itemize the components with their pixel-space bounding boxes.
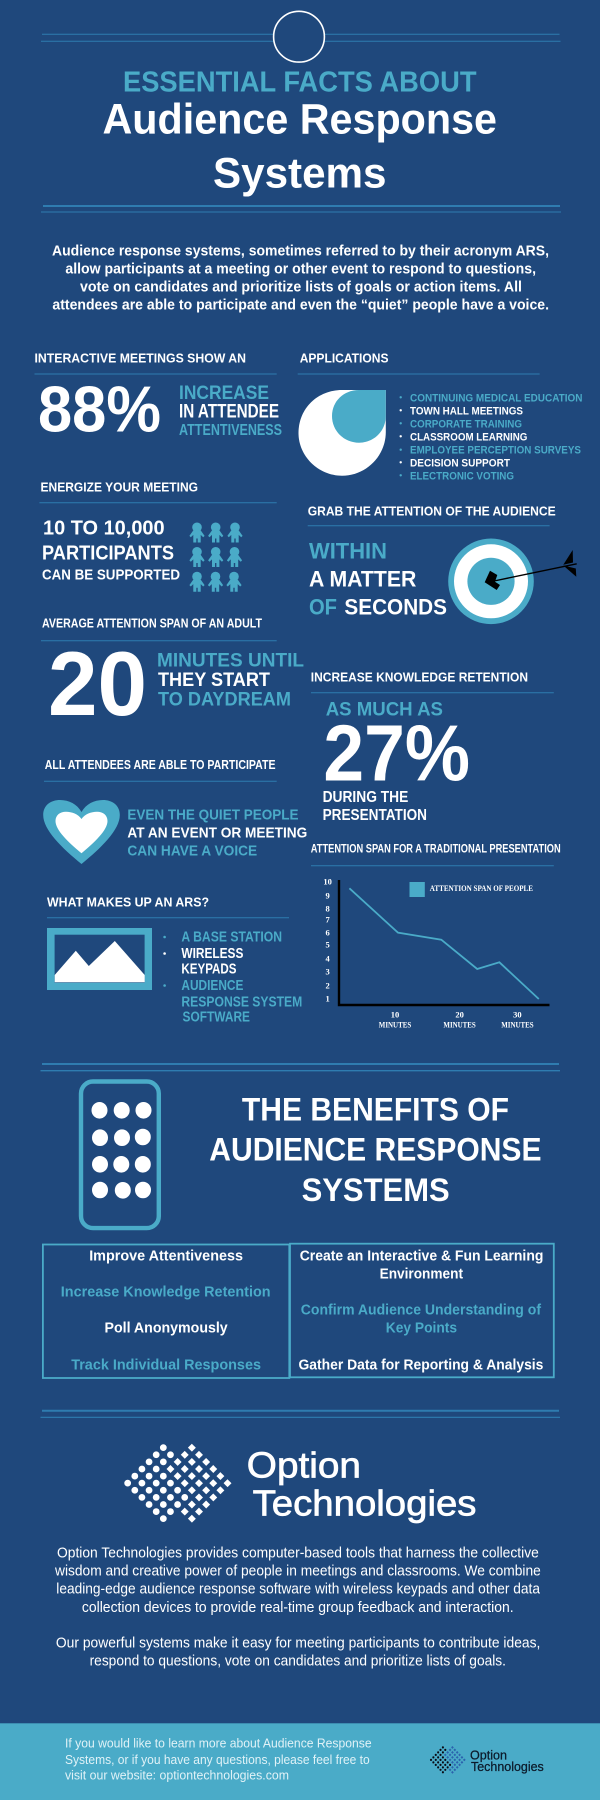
y axis labels: 7: [325, 915, 330, 925]
as much as: AS MUCH AS: [326, 699, 443, 720]
panel: benefits left: [43, 1244, 289, 1378]
company description: respond to questions, vote on candidates and prioritize lists of goals.: [90, 1654, 506, 1670]
minutes caption: MINUTES UNTIL: [157, 650, 304, 672]
title: [102, 67, 497, 197]
title rules: [41, 206, 561, 212]
y axis labels: [323, 876, 332, 1003]
panel: benefits right: Confirm Audience Understanding of: [301, 1303, 541, 1319]
axes: [339, 880, 550, 1005]
ARS component list: RESPONSE SYSTEM: [181, 994, 302, 1010]
applications list: CLASSROOM LEARNING: [410, 431, 528, 443]
panel: what makes up an ARS: [47, 895, 302, 1026]
x axis labels: MINUTES: [379, 1020, 411, 1030]
icon: teardrop: [298, 390, 386, 476]
minutes caption: [157, 650, 304, 711]
panel: benefits right: Gather Data for Reporting & Analysis: [298, 1357, 543, 1373]
intro paragraph: [52, 243, 549, 314]
title: Systems: [213, 149, 386, 197]
line chart: [323, 876, 550, 1030]
intro paragraph: allow participants at a meeting or other event to respond to questions,: [65, 261, 536, 278]
heading: grab attention: GRAB THE ATTENTION OF THE AUDIENCE: [308, 503, 556, 518]
x axis labels: MINUTES: [501, 1020, 534, 1030]
ARS component list: [163, 930, 302, 1026]
y axis labels: 10: [323, 876, 332, 886]
intro paragraph: Audience response systems, sometimes referred to by their acronym ARS,: [52, 243, 549, 260]
during the presentation: PRESENTATION: [323, 807, 427, 824]
panel: all attendees: [43, 757, 307, 864]
x axis labels: [379, 1010, 534, 1030]
panel: benefits right: Environment: [380, 1267, 463, 1283]
quiet people text: EVEN THE QUIET PEOPLE: [127, 806, 299, 823]
panel: benefits right: Key Points: [386, 1321, 457, 1337]
y axis labels: 1: [325, 993, 330, 1003]
quiet people text: [127, 806, 307, 859]
title: Audience Response: [102, 95, 497, 143]
icon: people grid: [189, 522, 243, 592]
stat caption: [179, 382, 282, 439]
title: ESSENTIAL FACTS ABOUT: [123, 67, 477, 99]
stat: 88%: 88%: [38, 373, 161, 446]
benefits heading: AUDIENCE RESPONSE: [209, 1132, 542, 1168]
heading: energize: ENERGIZE YOUR MEETING: [40, 479, 198, 494]
x axis labels: MINUTES: [443, 1020, 476, 1030]
during the presentation: [323, 789, 427, 824]
y axis labels: 8: [325, 903, 330, 913]
footer logo: Technologies: [471, 1759, 544, 1774]
legend: [410, 882, 533, 897]
participants text: [42, 517, 180, 583]
within a matter of seconds text: [309, 538, 447, 619]
within a matter of seconds text: WITHIN: [309, 538, 387, 563]
ARS component list: SOFTWARE: [182, 1010, 250, 1026]
logo wordmark: [247, 1444, 476, 1524]
x axis labels: 20: [455, 1010, 464, 1020]
quiet people text: CAN HAVE A VOICE: [127, 842, 257, 859]
company description: wisdom and creative power of people in meetings and classrooms. We combine: [54, 1564, 541, 1580]
benefits heading: SYSTEMS: [302, 1172, 450, 1208]
company description: [54, 1546, 541, 1670]
stat caption: ATTENTIVENESS: [179, 422, 282, 439]
applications list: CORPORATE TRAINING: [410, 418, 522, 430]
stat caption: INCREASE: [179, 382, 269, 404]
company description: collection devices to provide real-time group feedback and interaction.: [82, 1600, 514, 1616]
participants text: CAN BE SUPPORTED: [42, 566, 180, 583]
panel: benefits right: [290, 1244, 554, 1377]
participants text: PARTICIPANTS: [42, 543, 174, 565]
panel: footer: [0, 1723, 600, 1800]
minutes caption: THEY START: [158, 669, 270, 691]
y axis labels: 9: [325, 891, 330, 901]
footer logo: Option: [470, 1747, 507, 1762]
applications list: TOWN HALL MEETINGS: [410, 405, 523, 417]
intro paragraph: vote on candidates and prioritize lists of goals or action items. All: [80, 279, 522, 296]
logo mark: [128, 1448, 228, 1519]
intro paragraph: attendees are able to participate and even the “quiet” people have a voice.: [52, 297, 549, 314]
footer text: [65, 1736, 372, 1783]
benefits heading: THE BENEFITS OF: [242, 1092, 509, 1128]
y axis labels: 2: [325, 980, 330, 990]
y axis labels: 4: [325, 954, 330, 964]
footer text: Systems, or if you have any questions, please feel free to: [65, 1752, 370, 1767]
minutes caption: TO DAYDREAM: [158, 689, 291, 711]
legend: ATTENTION SPAN OF PEOPLE: [430, 883, 533, 893]
panel: grab the attention: [308, 503, 577, 624]
company description: leading-edge audience response software with wireless keypads and other data: [56, 1582, 541, 1598]
header rules and circle: [41, 11, 560, 62]
heading: all attendees: ALL ATTENDEES ARE ABLE TO PARTICIPATE: [45, 757, 276, 772]
ARS component list: WIRELESS: [181, 946, 244, 962]
within a matter of seconds text: A MATTER: [309, 567, 417, 592]
logo wordmark: Option: [247, 1444, 361, 1485]
within a matter of seconds text: OF: [309, 594, 337, 619]
panel: benefits right: Create an Interactive & Fun Learning: [300, 1249, 543, 1265]
panel: benefits left: Increase Knowledge Retention: [61, 1285, 271, 1301]
icon: keypad: [81, 1082, 159, 1228]
applications list: ELECTRONIC VOTING: [410, 470, 514, 482]
applications list: EMPLOYEE PERCEPTION SURVEYS: [410, 445, 581, 457]
participants text: 10 TO 10,000: [43, 517, 165, 539]
ARS component list: AUDIENCE: [181, 978, 244, 994]
stat: 20: 20: [48, 634, 147, 735]
panel: average attention span: [41, 616, 304, 735]
company description: Our powerful systems make it easy for meeting participants to contribute ideas,: [56, 1636, 540, 1652]
heading: what makes up an ARS: WHAT MAKES UP AN ARS?: [47, 895, 209, 910]
y axis labels: 6: [325, 927, 330, 937]
y axis labels: 5: [325, 940, 330, 950]
panel: benefits left: Track Individual Responses: [71, 1357, 261, 1373]
icon: target with arrow: [448, 538, 577, 624]
icon: picture frame with mountains: [47, 928, 152, 990]
footer text: If you would like to learn more about Audience Response: [65, 1736, 372, 1751]
quiet people text: AT AN EVENT OR MEETING: [127, 824, 307, 841]
stat: 27%: 27%: [323, 709, 470, 798]
company rules: [40, 1411, 560, 1417]
stat caption: IN ATTENDEE: [179, 400, 279, 422]
within a matter of seconds text: SECONDS: [344, 594, 447, 619]
applications list: [400, 392, 582, 482]
icon: heart: [43, 800, 120, 864]
panel: benefits left: Improve Attentiveness: [89, 1249, 243, 1265]
footer logo: [431, 1747, 544, 1774]
x axis labels: 10: [391, 1010, 399, 1020]
y axis labels: 3: [325, 966, 330, 976]
heading: knowledge retention: INCREASE KNOWLEDGE RETENTION: [311, 670, 528, 685]
heading: applications: APPLICATIONS: [300, 351, 389, 366]
heading: interactive meetings: INTERACTIVE MEETINGS SHOW AN: [34, 351, 246, 366]
panel: energize your meeting: [39, 479, 277, 592]
logo wordmark: Technologies: [253, 1483, 476, 1524]
data line: [349, 888, 539, 999]
applications list: CONTINUING MEDICAL EDUCATION: [410, 392, 582, 404]
ARS component list: A BASE STATION: [181, 930, 282, 946]
panel: attention span chart: [311, 843, 561, 1030]
during the presentation: DURING THE: [323, 789, 409, 806]
company description: Option Technologies provides computer-based tools that harness the collective: [57, 1546, 539, 1562]
applications list: DECISION SUPPORT: [410, 457, 510, 469]
benefits rules: [40, 1064, 560, 1071]
panel: knowledge retention: [311, 670, 554, 824]
heading: average attention span: AVERAGE ATTENTION SPAN OF AN ADULT: [42, 616, 262, 630]
x axis labels: 30: [513, 1010, 522, 1020]
ARS component list: KEYPADS: [181, 962, 237, 978]
logo: Option Technologies: [128, 1444, 477, 1524]
panel: applications: [298, 351, 582, 482]
benefits heading: [209, 1092, 542, 1208]
panel: interactive meetings: [34, 351, 282, 446]
panel: benefits left: Poll Anonymously: [104, 1321, 228, 1337]
footer text: visit our website: optiontechnologies.com: [65, 1768, 289, 1783]
